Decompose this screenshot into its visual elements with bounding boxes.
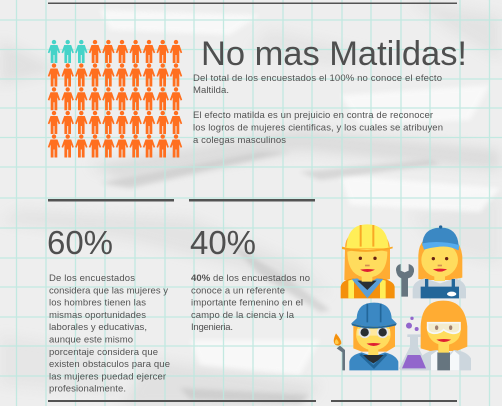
intro text block: Maltilda. <box>193 85 229 96</box>
text block: 40% description <box>191 273 310 333</box>
text block: 40% description: campo de la ciencia y la <box>191 310 295 321</box>
icons: women in science and engineering <box>334 224 471 370</box>
text block: 60% description: porcentaje considera que <box>49 347 158 358</box>
text block: 60% description <box>49 273 170 395</box>
pictogram: 50 people, 3 highlighted <box>48 40 182 158</box>
text block: 40% description: conoce a un referente <box>191 285 285 296</box>
text block: 60% description: De los encuestados <box>49 273 135 284</box>
text block: 60% description: las mujeres puedad ejercer <box>49 371 166 382</box>
intro text block: El efecto matilda es un prejuicio en contra de reconocer <box>193 110 433 121</box>
text block: 60% description: laborales y educativas, <box>49 322 147 333</box>
intro text block: Del total de los encuestados el 100% no conoce el efecto <box>193 73 442 84</box>
text block: 60% description: existen obstaculos para que <box>49 359 170 370</box>
text block: 60% description: mismas oportunidades <box>49 310 146 321</box>
icon: construction worker woman <box>341 224 395 298</box>
text block: 60% description: aunque este mismo <box>49 334 133 346</box>
icon: welder woman with torch <box>334 303 398 370</box>
stat: 60%: 60% <box>47 224 113 261</box>
text block: 40% description: importante femenino en el <box>191 298 303 309</box>
icon: mechanic woman with wrench <box>396 225 466 298</box>
title: No mas Matildas! <box>201 35 467 73</box>
intro text block: los logros de mujeres cientificas, y los cuales se atribuyen <box>193 122 443 134</box>
text block: 60% description: considera que las mujeres y <box>49 285 168 296</box>
text block: 60% description: profesionalmente. <box>49 384 126 395</box>
text block: 40% description: 40% de los encuestados no <box>191 273 310 284</box>
intro text block: a colegas masculinos <box>193 135 286 146</box>
stat: 40%: 40% <box>190 224 256 261</box>
text block: 60% description: los hombres tienen las <box>49 298 146 309</box>
intro text block <box>193 73 443 146</box>
icon: scientist woman with flask <box>399 301 471 370</box>
text block: 40% description: Ingenieria. <box>191 322 233 333</box>
